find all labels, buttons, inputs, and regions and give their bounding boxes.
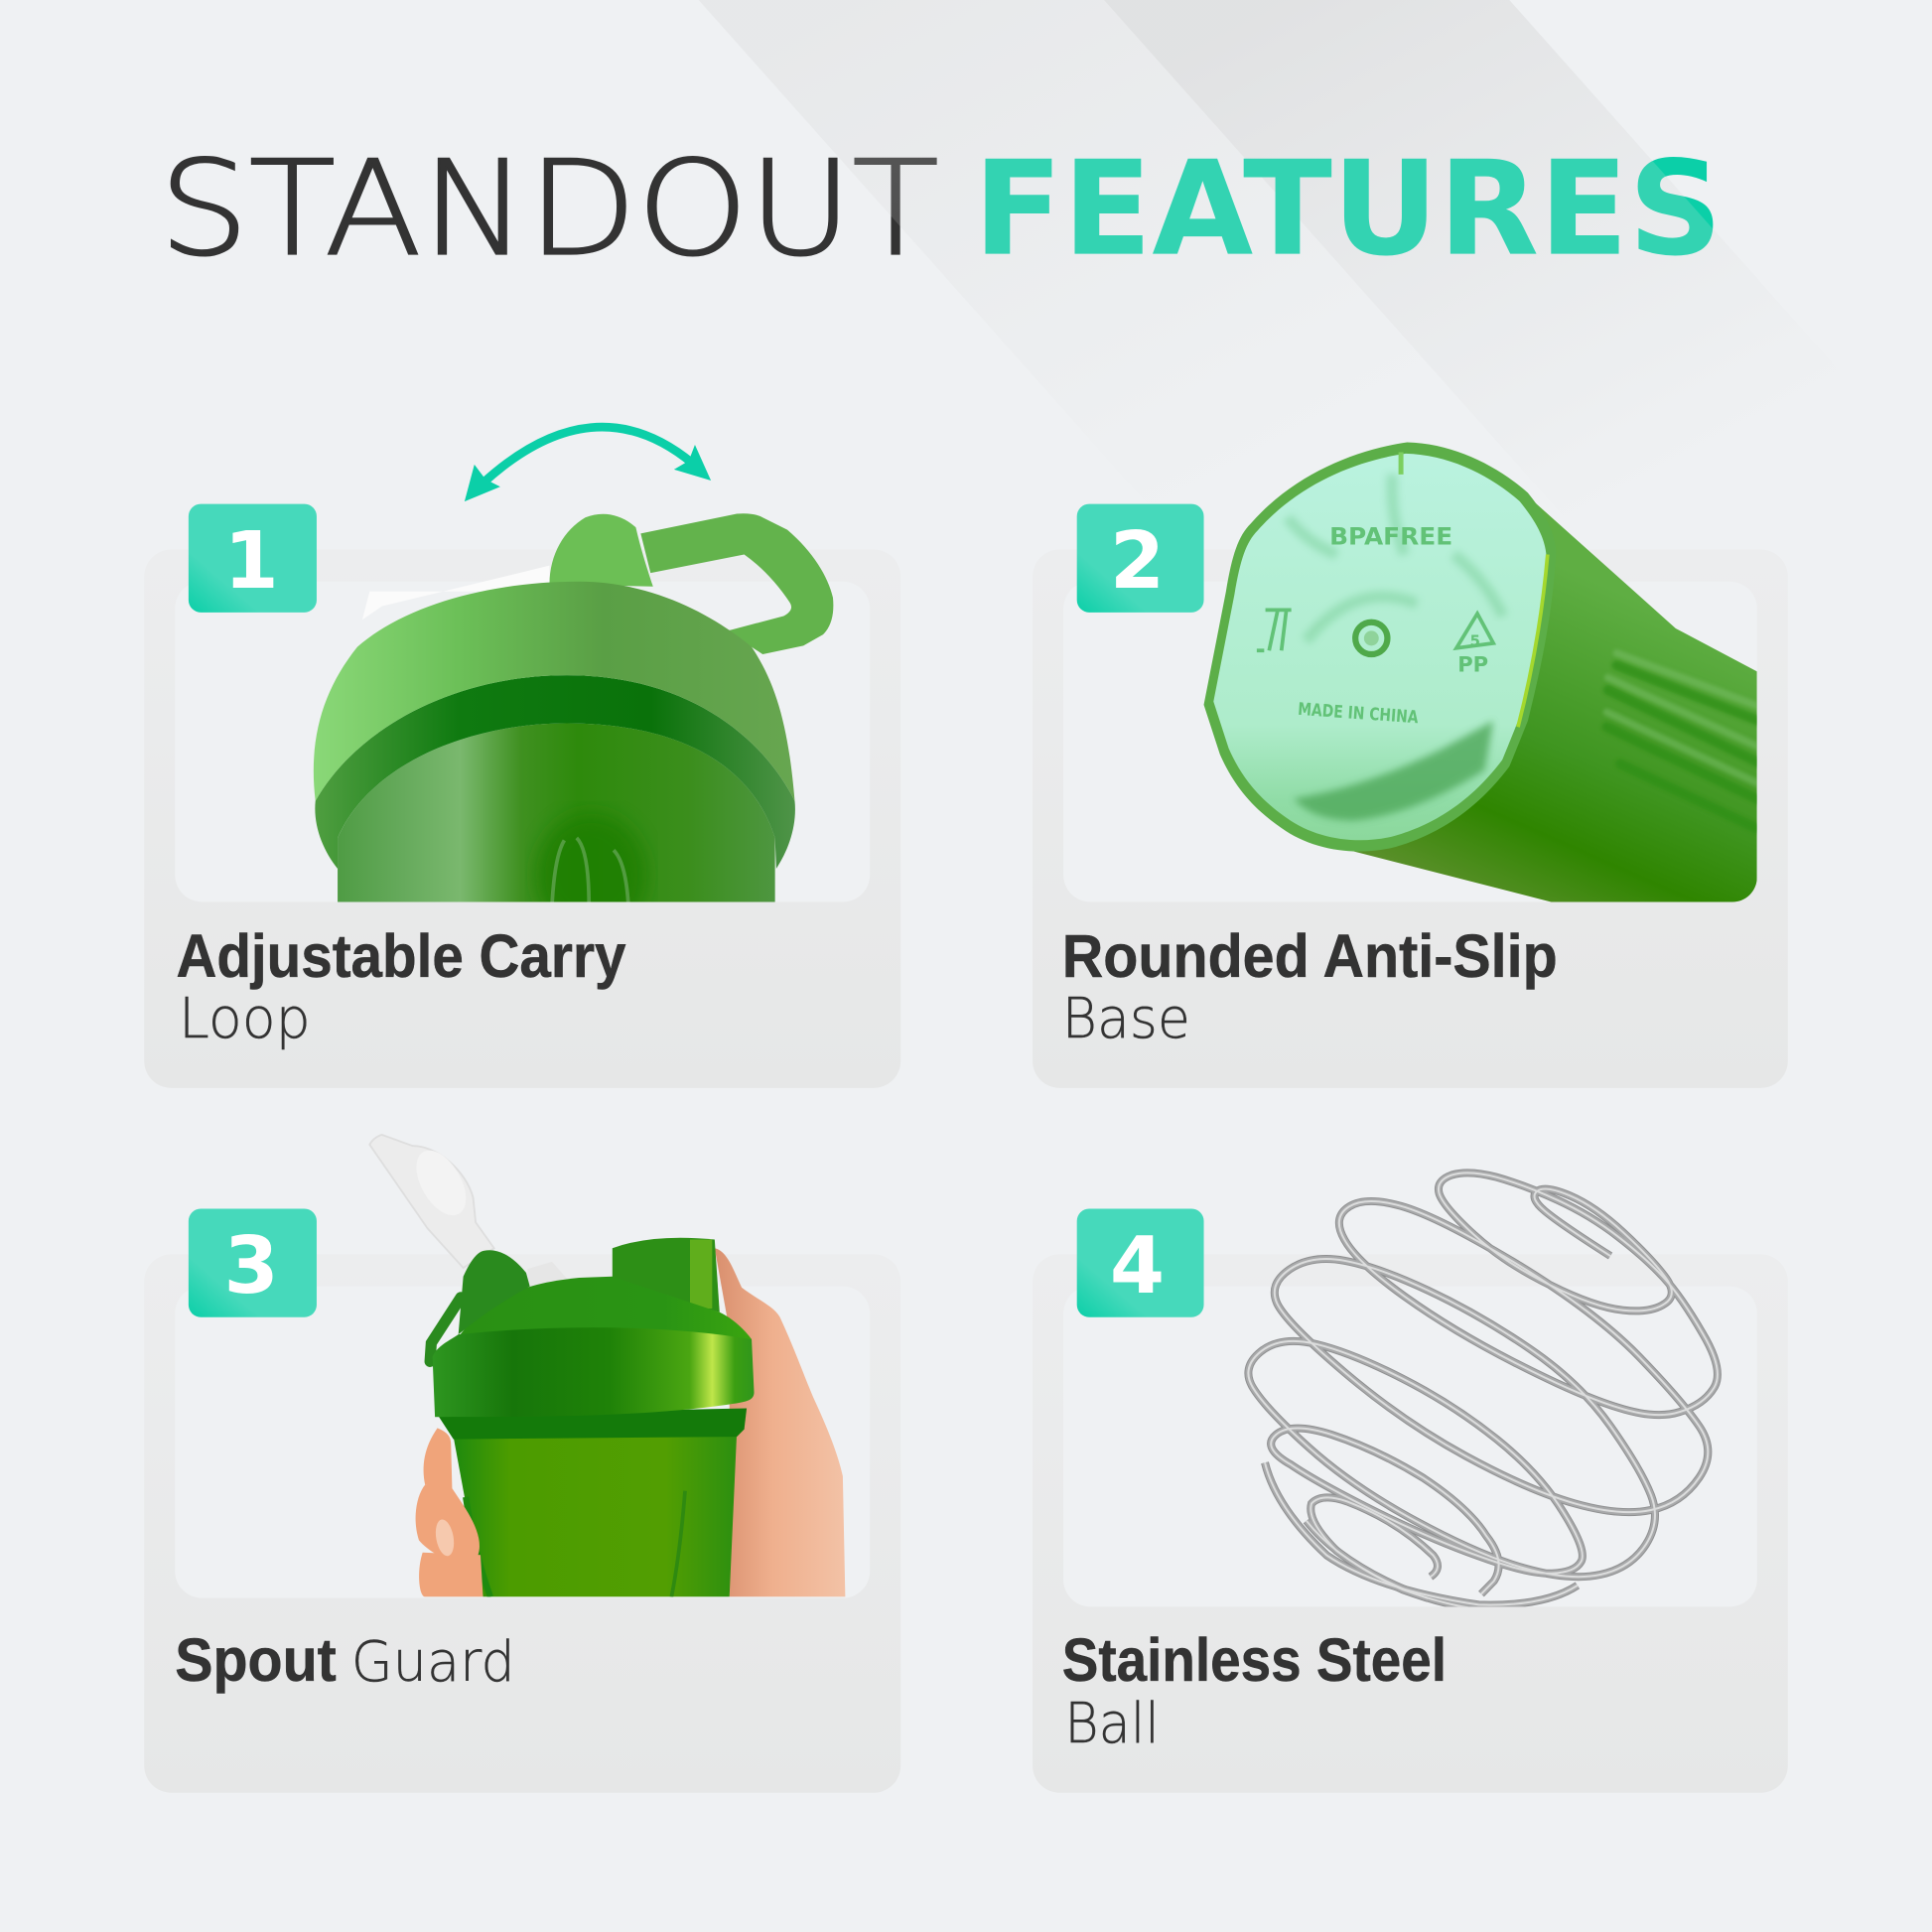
badge 4: 4: [1110, 1219, 1165, 1311]
panel 4 background: [1033, 1254, 1788, 1793]
panel 1 background: [144, 550, 900, 1088]
panel 3 image area: [175, 1287, 870, 1598]
lid: [613, 1238, 720, 1312]
badge 1: 1: [224, 514, 279, 607]
panel 1 subheading: Loop: [179, 987, 311, 1051]
fingers: [416, 1428, 483, 1596]
panel 1 heading: Adjustable Carry: [176, 922, 626, 990]
rotation arrow: [465, 427, 711, 501]
panel 1 image area: [175, 582, 870, 901]
shaker lid with carry loop: [314, 513, 833, 936]
panel 2: rounded anti-slip base: [1033, 443, 1788, 1088]
panel 4 image area: [1063, 1287, 1757, 1606]
panel 4 subheading: Ball: [1064, 1692, 1160, 1756]
badge 3: 3: [224, 1219, 279, 1311]
badge 3: [189, 1208, 317, 1317]
embossed text: PP: [1457, 651, 1488, 676]
title: STANDOUT: STANDOUT: [159, 134, 939, 286]
badge 1: [189, 504, 317, 613]
ring: [438, 1409, 747, 1440]
background diagonal bands: [699, 0, 1932, 628]
bottle base: [1204, 443, 1774, 911]
badge 2: [1077, 504, 1204, 613]
title: FEATURES: FEATURES: [973, 134, 1723, 286]
badge 2: 2: [1110, 514, 1165, 607]
panel 3: spout guard: [144, 1135, 900, 1793]
panel 3 heading: Spout: [175, 1626, 337, 1694]
panel 3 heading: [175, 1626, 515, 1695]
embossed text: 5: [1470, 631, 1480, 649]
panel 2 subheading: Base: [1062, 987, 1190, 1051]
embossed text: MADE IN CHINA: [1297, 700, 1420, 728]
panel 2 heading: Rounded Anti-Slip: [1062, 922, 1558, 990]
panel 2 background: [1033, 550, 1788, 1088]
embossed text: [1297, 523, 1488, 728]
shaker in hand: [369, 1135, 845, 1596]
panel 1: adjustable carry loop: [144, 427, 900, 1088]
panel 3 heading: Guard: [351, 1630, 515, 1695]
steel whisk spring: [1248, 1173, 1718, 1607]
embossed text: BPAFREE: [1329, 523, 1452, 551]
hand right: [715, 1248, 845, 1596]
carry loop: [430, 1298, 461, 1361]
panel 4 heading: Stainless Steel: [1062, 1626, 1447, 1694]
panel 3 background: [144, 1254, 900, 1793]
panel 4: stainless steel ball: [1033, 1173, 1788, 1793]
panel 2 image area: [1063, 582, 1757, 901]
body: [454, 1432, 737, 1596]
badge 4: [1077, 1208, 1204, 1317]
white spout cap: [369, 1135, 494, 1268]
